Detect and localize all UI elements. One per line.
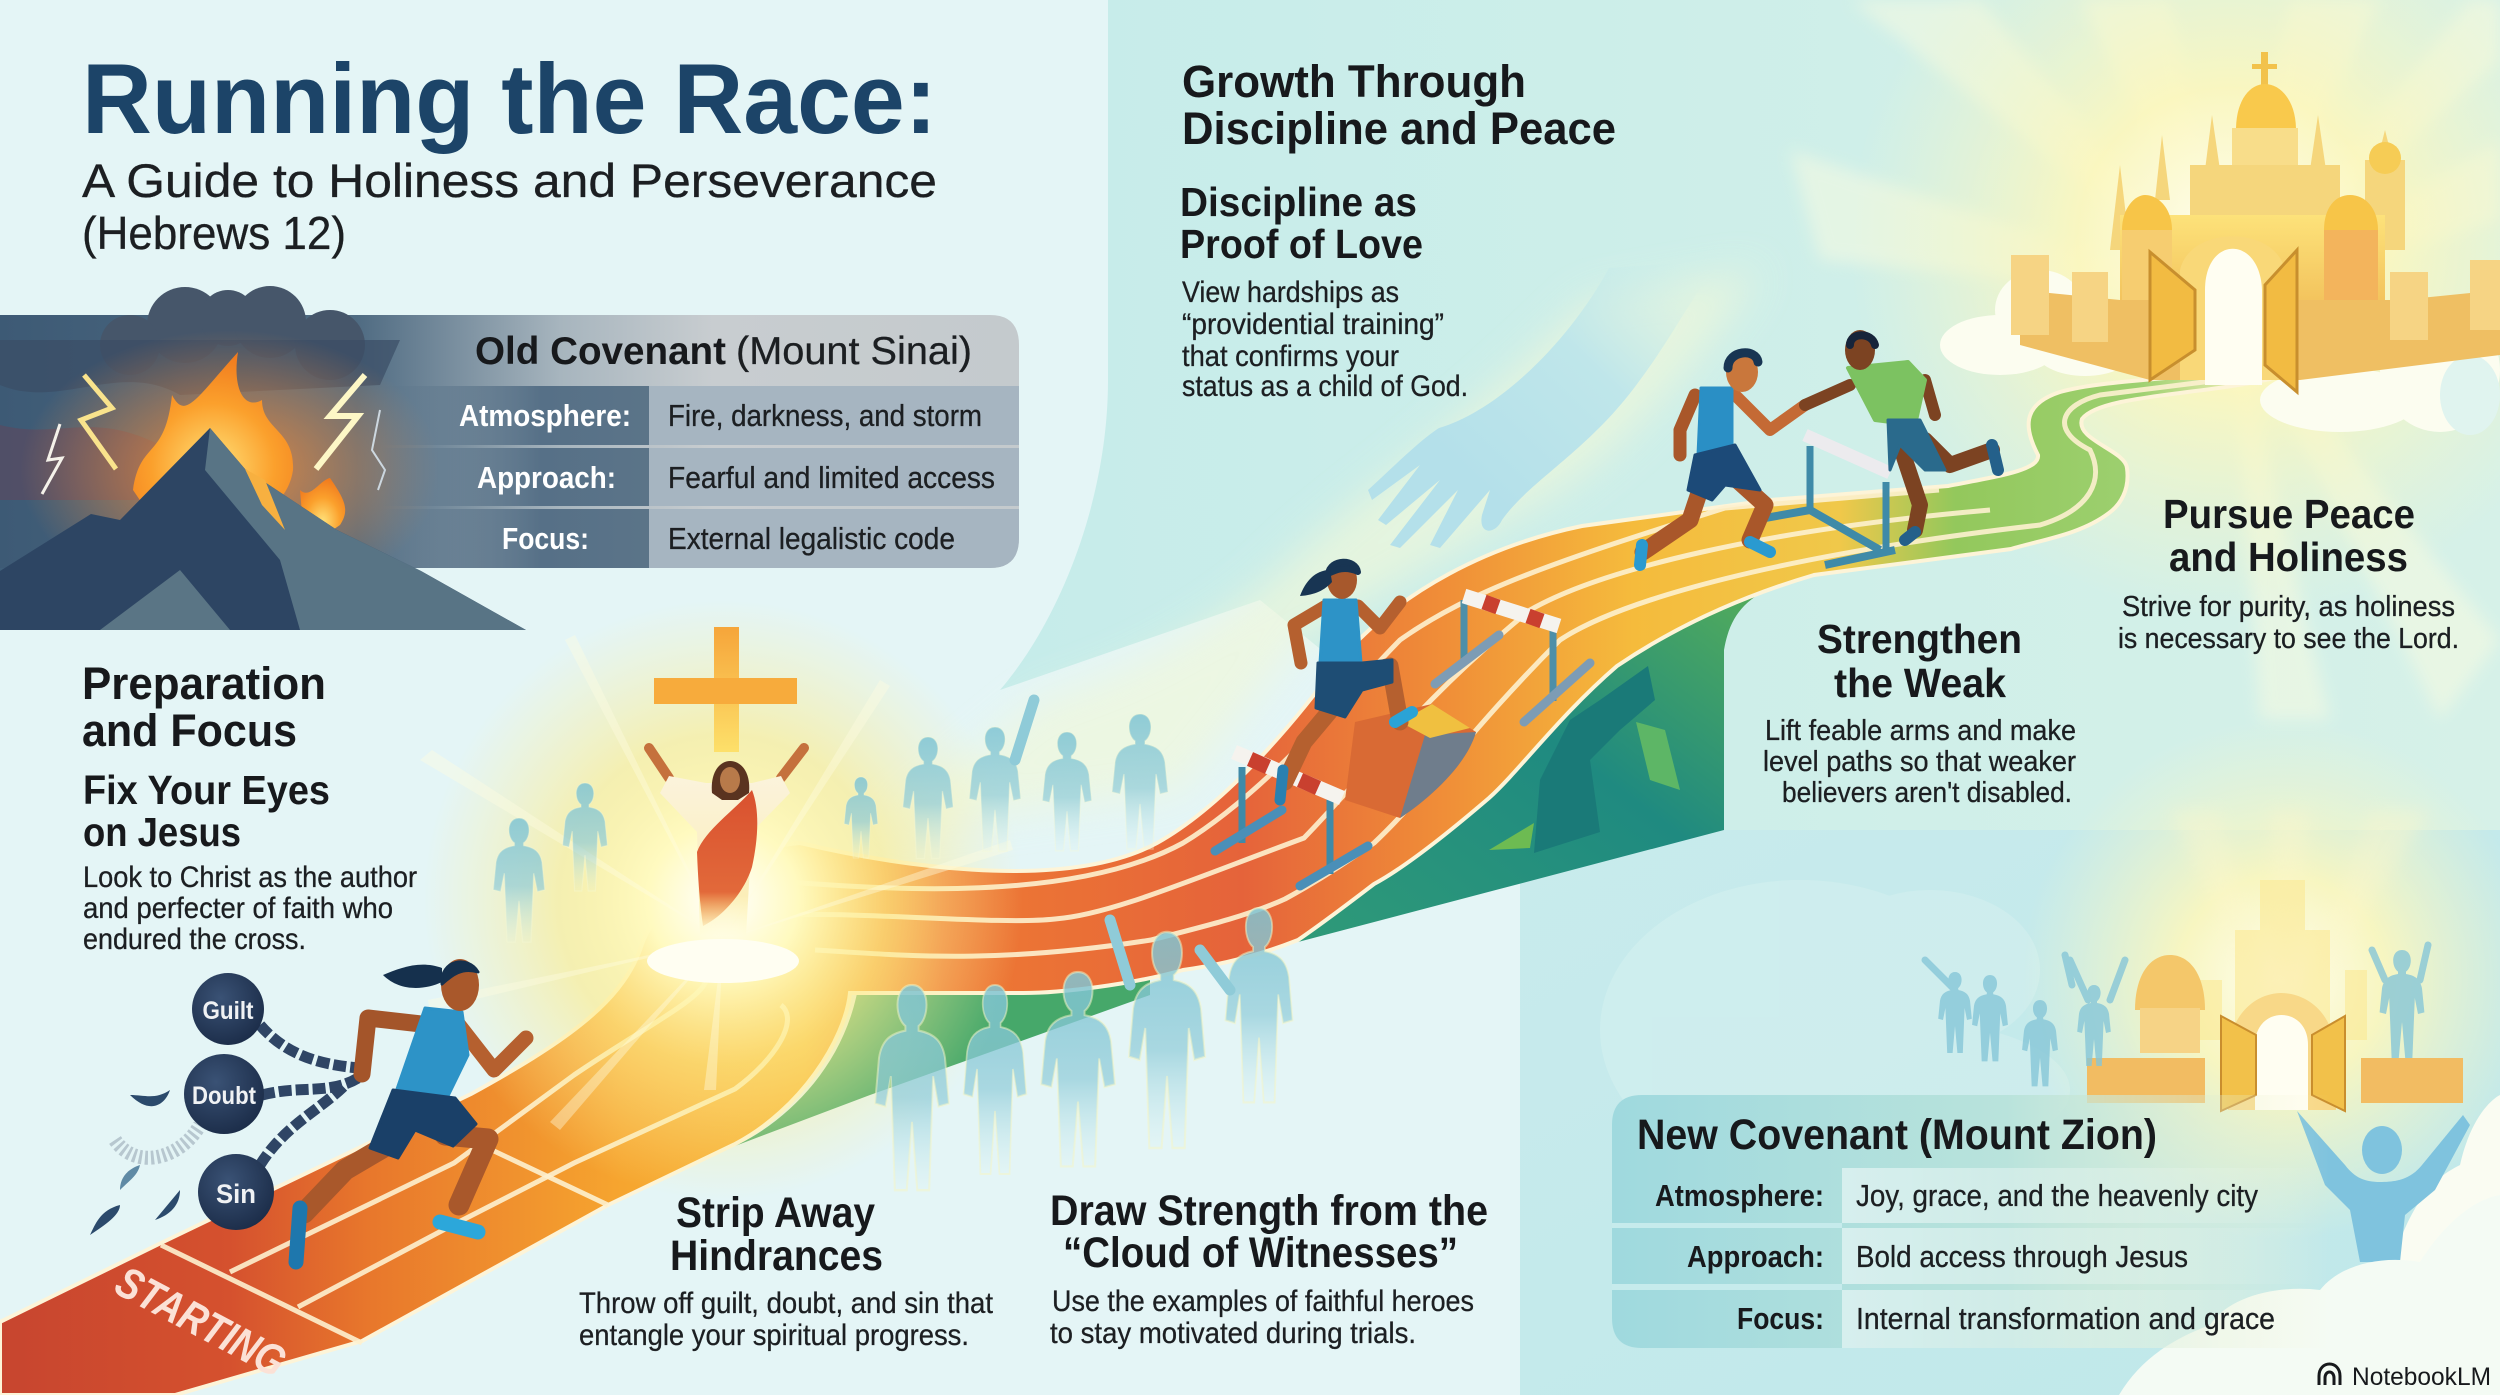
heading: preparation: Preparation [82, 658, 326, 709]
row: approach: Bold access through Jesus [1856, 1239, 2188, 1274]
debris shed behind runner [90, 1090, 200, 1235]
text block: strip away hindrances: entangle your spiritual progress. [579, 1319, 969, 1352]
title: Running the Race: [82, 43, 937, 154]
row: focus [380, 509, 1019, 568]
row: atmosphere [1655, 1178, 2258, 1213]
weight: guilt [192, 973, 264, 1045]
Old Covenant panel with storm mountain [0, 286, 1019, 630]
text block: strengthen the weak: the Weak [1834, 660, 2006, 706]
text block: strip away hindrances: Hindrances [670, 1232, 883, 1280]
text block: pursue peace: Strive for purity, as holiness [2122, 591, 2455, 623]
light rays behind the heavenly city [1790, 0, 2500, 720]
New Covenant panel: New Covenant (Mount Zion) [1637, 1111, 2157, 1159]
text block: pursue peace: is necessary to see the Lord. [2118, 623, 2459, 655]
weight: doubt: Doubt [192, 1082, 257, 1110]
witnesses beside Jesus [493, 700, 1168, 942]
text block: strip away hindrances [579, 1189, 994, 1352]
title row: (Mount Sinai) [736, 330, 972, 373]
text block: pursue peace: and Holiness [2169, 534, 2408, 580]
row: approach [380, 448, 1019, 506]
heading: growth [1182, 56, 1616, 154]
weight: guilt: Guilt [202, 997, 254, 1025]
text block: strengthen the weak: level paths so that weaker [1763, 746, 2076, 778]
text block: discipline as proof of love: “providential training” [1182, 308, 1444, 341]
New Covenant panel [1612, 1095, 2332, 1348]
row: atmosphere: Atmosphere: [1655, 1178, 1824, 1213]
text block: strengthen the weak [1763, 616, 2076, 809]
storm clouds [100, 286, 365, 380]
Jesus figure [647, 748, 804, 983]
row: focus: Focus: [502, 521, 589, 556]
text block: discipline as proof of love: Proof of Love [1180, 221, 1423, 267]
foreground worshipper [2297, 1111, 2470, 1262]
text block: discipline as proof of love: View hardships as [1182, 276, 1399, 309]
foreground clouds [2119, 1195, 2500, 1395]
back cloud [2400, 1095, 2500, 1310]
track lane lines [161, 375, 2260, 1343]
text block: cloud of witnesses: Use the examples of faithful heroes [1052, 1285, 1474, 1318]
race track path [0, 362, 2290, 1395]
text block: discipline as proof of love: status as a child of God. [1182, 370, 1468, 403]
text block: strengthen the weak: Strengthen [1817, 616, 2022, 662]
runner with chains [296, 959, 526, 1262]
title row [475, 330, 972, 373]
row: focus: External legalistic code [668, 521, 955, 556]
runner climbing [1280, 561, 1412, 800]
row: focus: Internal transformation and grace [1856, 1301, 2275, 1336]
row: atmosphere: Joy, grace, and the heavenly city [1856, 1178, 2258, 1213]
weight: doubt [184, 1054, 264, 1134]
glow around Jesus [420, 600, 1023, 1200]
text block: pursue peace: Pursue Peace [2163, 491, 2415, 537]
text block: fix your eyes: Fix Your Eyes [83, 767, 330, 813]
row: atmosphere [380, 386, 1019, 445]
text block: fix your eyes: and perfecter of faith who [83, 892, 393, 925]
hurdle: lower [1215, 752, 1368, 886]
clouds around city [1940, 270, 2500, 435]
mountain [0, 428, 526, 630]
text block: fix your eyes: endured the cross. [83, 923, 306, 956]
row: approach: Approach: [477, 460, 616, 495]
text block: strip away hindrances: Throw off guilt, doubt, and sin that [579, 1287, 994, 1320]
faint city [2200, 880, 2367, 1040]
divine hand [1368, 260, 1720, 548]
hillside under the track [735, 585, 1775, 1146]
heavenly city [1940, 52, 2500, 435]
heading: growth: Growth Through [1182, 56, 1526, 107]
hurdle: middle [1435, 596, 1590, 722]
worshippers [1925, 945, 2428, 1086]
Mount Zion scene [1600, 720, 2500, 1240]
weight: sin: Sin [216, 1179, 256, 1209]
text block: fix your eyes: Look to Christ as the author [83, 861, 417, 894]
text block: fix your eyes [83, 767, 417, 956]
text block: cloud of witnesses [1050, 1187, 1488, 1350]
row: approach: Fearful and limited access [668, 460, 995, 495]
row: atmosphere: Fire, darkness, and storm [668, 398, 982, 433]
cross [654, 627, 797, 752]
text block: discipline as proof of love: that confirms your [1182, 340, 1399, 373]
row: approach [1687, 1239, 2188, 1274]
heading: preparation [82, 658, 326, 756]
text block: strip away hindrances: Strip Away [676, 1189, 875, 1237]
subtitle: A Guide to Holiness and Perseverance [82, 154, 937, 207]
flames [133, 352, 293, 515]
runners clasping hands [1640, 330, 1998, 565]
rock obstacle [1345, 704, 1476, 818]
scripture reference: (Hebrews 12) [82, 207, 346, 259]
lightning bolts [42, 375, 385, 494]
text block: cloud of witnesses: to stay motivated during trials. [1050, 1317, 1416, 1350]
witnesses alongside the track [875, 908, 1293, 1190]
NotebookLM mark: NotebookLM [2352, 1363, 2491, 1391]
heading: preparation: and Focus [82, 705, 297, 756]
heading: growth: Discipline and Peace [1182, 103, 1616, 154]
weight: sin [198, 1154, 274, 1230]
row: atmosphere: Atmosphere: [459, 398, 631, 433]
title row: Old Covenant [475, 330, 726, 373]
chains [260, 1025, 358, 1165]
text block: strengthen the weak: Lift feable arms and make [1765, 715, 2076, 747]
row: focus: Focus: [1737, 1301, 1824, 1336]
text block: cloud of witnesses: “Cloud of Witnesses” [1063, 1229, 1458, 1277]
hurdle: upper [1765, 435, 1895, 565]
text block: cloud of witnesses: Draw Strength from the [1050, 1187, 1488, 1235]
row: approach: Approach: [1687, 1239, 1824, 1274]
pale clouds [1600, 880, 2070, 1180]
text block: discipline as proof of love: Discipline as [1180, 179, 1417, 225]
text block: strengthen the weak: believers aren't disabled. [1782, 777, 2072, 809]
text block: pursue peace [2118, 491, 2459, 655]
text block: discipline as proof of love [1180, 179, 1468, 403]
text block: fix your eyes: on Jesus [83, 809, 241, 855]
